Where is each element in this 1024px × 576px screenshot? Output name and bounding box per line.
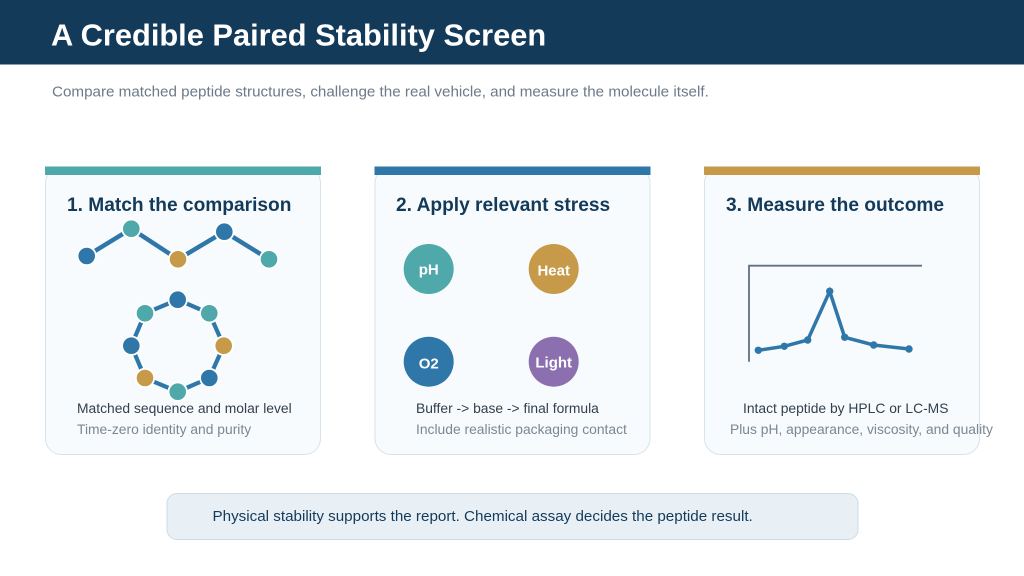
icon: pH (404, 244, 454, 294)
caption: measure the outcome: Plus pH, appearance, viscosity, and quality (730, 421, 993, 437)
caption: apply relevant stress (416, 400, 627, 437)
caption: apply relevant stress: Include realistic packaging contact (416, 421, 627, 437)
panel: measure the outcome (704, 166, 993, 454)
callout: key takeaway: Physical stability supports the report. Chemical assay decides the peptide result. (212, 508, 753, 525)
icon: heat (529, 244, 579, 294)
caption: match the comparison: Matched sequence and molar level (77, 400, 292, 416)
icon: heat: Heat (537, 262, 570, 280)
icon: oxygen: O2 (419, 356, 439, 372)
callout: key takeaway (167, 494, 858, 540)
icon: light: Light (535, 354, 572, 372)
panel: match the comparison (45, 166, 321, 454)
icon: cyclic peptide ring (122, 290, 233, 401)
heading: apply relevant stress: 2. Apply relevant stress (396, 195, 610, 216)
caption: measure the outcome: Intact peptide by HPLC or LC-MS (743, 400, 948, 416)
caption: match the comparison: Time-zero identity and purity (77, 421, 251, 437)
subtitle: Compare matched peptide structures, challenge the real vehicle, and measure the molecule itself. (52, 84, 709, 100)
caption: match the comparison (77, 400, 292, 437)
caption: measure the outcome (730, 400, 993, 437)
icon: light (529, 337, 579, 387)
title: A Credible Paired Stability Screen (51, 18, 546, 52)
heading: measure the outcome: 3. Measure the outcome (726, 195, 944, 216)
header banner (0, 0, 1024, 64)
icon: pH: pH (419, 262, 439, 278)
icon: oxygen (404, 337, 454, 387)
panel: apply relevant stress (374, 166, 650, 454)
caption: apply relevant stress: Buffer -> base -> final formula (416, 400, 599, 416)
icon: linear peptide chain (78, 220, 278, 268)
heading: match the comparison: 1. Match the comparison (67, 195, 291, 216)
line chart: chromatogram peak (749, 266, 922, 362)
